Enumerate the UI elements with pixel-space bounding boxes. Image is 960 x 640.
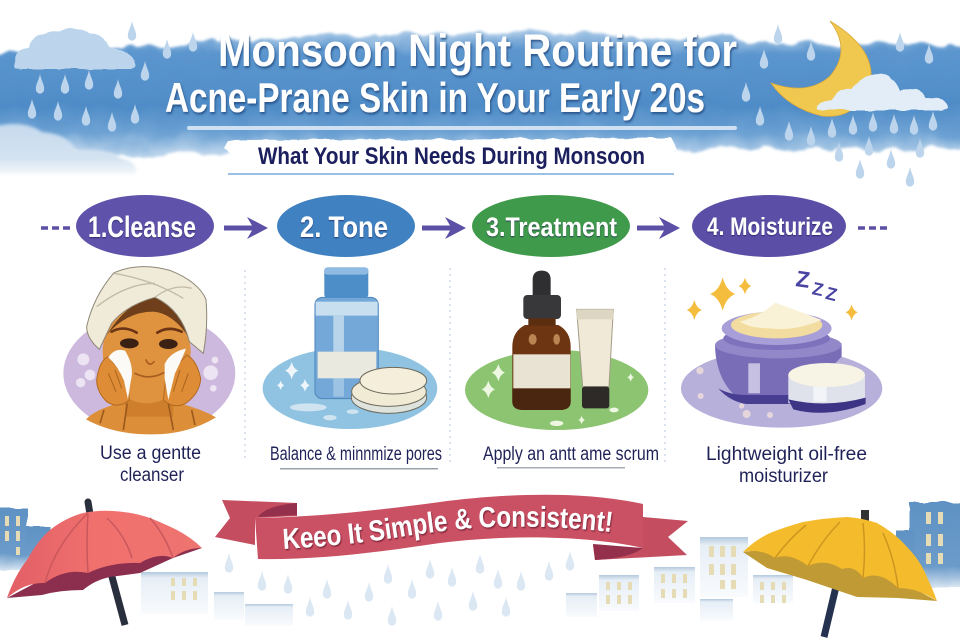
nose and mouth — [135, 360, 164, 377]
red underside — [7, 545, 202, 598]
red handle — [108, 562, 125, 625]
sleep letters — [794, 265, 839, 305]
purple backdrop — [63, 313, 235, 434]
dashes left — [41, 226, 70, 230]
sparkles — [482, 364, 634, 424]
sparkles — [687, 277, 858, 320]
yellow canopy — [743, 517, 937, 601]
panel: toner illustration — [263, 267, 437, 429]
jar lid — [788, 363, 866, 413]
arrow 2 — [422, 217, 466, 239]
step 3 pill — [472, 195, 630, 257]
yellow underside — [743, 545, 937, 601]
cloud bottom left — [0, 124, 136, 174]
caption 1: cleanser — [120, 465, 185, 486]
serum label — [513, 354, 570, 388]
red umbrella — [7, 502, 202, 625]
eyes — [120, 338, 178, 349]
spots — [290, 403, 359, 420]
cloud top left — [15, 27, 136, 69]
title line 2: Acne-Prane Skin in Your Early 20s — [165, 74, 705, 121]
serum bottle — [512, 271, 571, 410]
ribbon left tail — [215, 500, 297, 545]
yellow handle — [824, 570, 840, 637]
caption 1 — [100, 443, 201, 486]
green backdrop — [465, 350, 648, 430]
shoulders — [86, 402, 216, 434]
caption 4: moisturizer — [739, 466, 829, 487]
ribbon text: Keeo It Simple & Consistent! — [284, 506, 614, 551]
caption 4: Lightweight oil-free — [706, 444, 867, 465]
step 4 pill — [692, 195, 846, 257]
raindrops right — [742, 24, 937, 187]
step 1 pill — [76, 195, 214, 257]
sleep letters: Z — [794, 265, 812, 293]
panel: treatment illustration — [465, 271, 648, 430]
steps row — [41, 195, 890, 257]
subtitle plate — [224, 138, 680, 175]
sleep letters: Z — [810, 278, 825, 300]
eyebrows — [112, 329, 182, 333]
lilac backdrop — [681, 349, 882, 428]
sleep letters: Z — [824, 283, 839, 305]
panel: cleanse illustration — [63, 267, 235, 434]
bottle — [315, 267, 378, 399]
blue buildings left — [0, 508, 50, 570]
pale buildings — [141, 537, 793, 626]
title line 1: Monsoon Night Routine for — [218, 25, 737, 76]
red canopy — [7, 511, 202, 598]
sparkles — [277, 362, 310, 392]
yellow umbrella — [743, 510, 937, 637]
caption 3: Apply an antt ame scrum — [483, 444, 659, 465]
windows — [5, 512, 943, 604]
step 4 pill: 4. Moisturize — [707, 213, 833, 241]
title rule — [187, 126, 737, 130]
spots — [696, 367, 773, 418]
dashes right — [858, 226, 890, 230]
dropper — [533, 271, 551, 297]
ribbon banner — [215, 494, 688, 560]
caption 1: Use a gentte — [100, 443, 201, 464]
ribbon folds — [258, 503, 643, 560]
arrow 1 — [224, 217, 268, 239]
neck — [125, 383, 173, 417]
jar — [715, 303, 842, 404]
city and rain footer — [0, 502, 960, 626]
foam bubbles — [76, 353, 218, 392]
ribbon main — [255, 495, 643, 559]
crescent moon — [771, 21, 871, 116]
header banner — [0, 21, 960, 187]
subtitle text: What Your Skin Needs During Monsoon — [258, 143, 645, 170]
step 3 pill: 3.Treatment — [486, 212, 617, 242]
cream — [731, 312, 822, 338]
panel: moisturizer illustration — [681, 265, 882, 428]
towel — [87, 267, 207, 353]
blue backdrop — [263, 348, 437, 429]
caption 4 — [706, 444, 867, 487]
bottle cap — [324, 267, 368, 298]
raindrops left — [28, 21, 197, 132]
arrow 3 — [637, 217, 680, 239]
ribbon right tail — [593, 517, 688, 560]
caption 2: Balance & minnmize pores — [270, 444, 442, 465]
captions — [100, 443, 867, 487]
cloud by moon — [818, 74, 948, 110]
title — [165, 25, 737, 121]
hands — [97, 355, 201, 406]
blue watercolor band — [0, 32, 960, 156]
tube — [577, 309, 613, 408]
cotton pads — [351, 367, 427, 413]
pale raindrops — [225, 551, 574, 626]
step 2 pill: 2. Tone — [300, 211, 388, 244]
step 2 pill — [277, 195, 415, 257]
face — [103, 300, 191, 403]
hair — [107, 297, 189, 338]
blue buildings right — [895, 502, 960, 588]
foam — [108, 349, 186, 400]
bottle label — [318, 352, 376, 378]
step 1 pill: 1.Cleanse — [88, 211, 196, 244]
